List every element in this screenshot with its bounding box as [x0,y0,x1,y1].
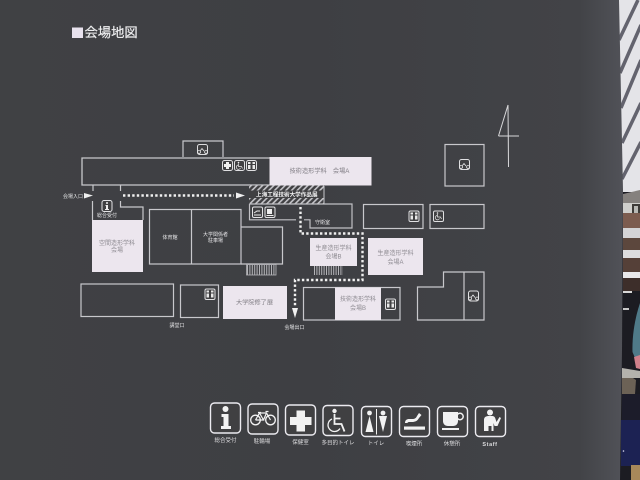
building: bicycle parking top [183,141,223,157]
legend: reception [210,403,240,444]
building: northeast bicycle parking [445,144,484,186]
legend: reception: 総合受付 [214,436,237,444]
exhibit hall: production design A: 会場A [387,258,404,266]
exhibit hall: production design B: 生産造形学科 [315,244,352,252]
building: rest area and guard room: 守衛室 [315,219,330,226]
exhibit hall: technical design B: 技術造形学科 [340,295,376,303]
legend [210,403,506,448]
exhibit hall: production design B: 会場B [325,252,342,260]
icon: toilet [246,160,256,170]
title: 会場地図 [84,25,138,40]
legend: staff: Staff [482,442,498,448]
building: rest area and guard room [250,204,352,228]
legend: smoking area: 喫煙所 [406,440,423,448]
building: gymnasium and parking: 大学関係者 [203,231,228,238]
exhibit hall: technical design A: 技術造形学科 会場A [290,167,350,175]
legend: rest area [438,406,468,448]
building: toilet block [364,204,423,228]
legend: accessible toilet [321,406,355,446]
handwritten number 4 [498,105,519,167]
exhibit hall: technical design A [270,157,372,186]
legend: rest area: 休憩所 [444,440,461,448]
exhibit hall: technical design B: 会場B [350,304,366,312]
legend: bicycle parking: 駐輪場 [254,437,271,445]
exhibit hall: spatial design: 空間造形学科 [99,239,135,247]
legend: bicycle parking [248,404,278,445]
entrance label and arrow [63,193,93,200]
reception icon and label: 総合受付 [97,212,117,219]
exhibit hall: technical design B [304,288,400,320]
entrance gate walls and reception [92,185,143,220]
exhibit hall: production design A: 生産造形学科 [377,249,414,257]
exhibit hall: graduate exhibition: 大学院修了展 [236,298,273,306]
icon: accessible toilet [234,160,244,170]
dotted route: to exit [292,207,362,318]
building: southwest block [81,284,174,316]
exhibit hall: graduate exhibition [223,286,287,319]
legend: smoking area [400,406,430,448]
building: south block with toilet [180,285,218,318]
exhibit hall: spatial design [92,220,143,272]
reception icon and label [97,200,117,219]
exhibit hall: production design B [310,238,357,270]
building: gymnasium and parking: 駐車場 [208,237,223,244]
building: annex with stairs [241,227,282,275]
icon: smoking [252,207,262,218]
building: gymnasium and parking [150,210,241,264]
legend: toilet [362,406,392,447]
venue map [63,141,484,331]
work exhibition hatched band [249,186,324,204]
exit label: 会場出口 [284,324,305,331]
building: gymnasium and parking: 体育館 [162,234,178,241]
icon: cafe [265,207,275,218]
entrance label and arrow: 会場入口 [63,193,83,200]
legend: toilet: トイレ [368,441,384,447]
legend: staff [476,406,506,448]
building: long north wing [82,158,270,185]
legend: health room: 保健室 [292,438,309,446]
building: L-shaped with bicycle parking [418,272,484,320]
icon: first aid [222,160,232,170]
exhibit hall: production design A [368,238,423,275]
auditorium entrance label: 講堂口 [170,322,185,329]
legend: accessible toilet: 多目的トイレ [321,438,355,446]
work exhibition hatched band: 上海工程技術大学作品展 [256,190,318,198]
dotted route: entrance to work exhibition [123,192,245,198]
exhibit hall: spatial design: 会場 [111,246,123,254]
legend: health room [286,405,316,446]
photo background: building behind the board [615,0,640,480]
building: accessible toilet block [430,204,484,228]
